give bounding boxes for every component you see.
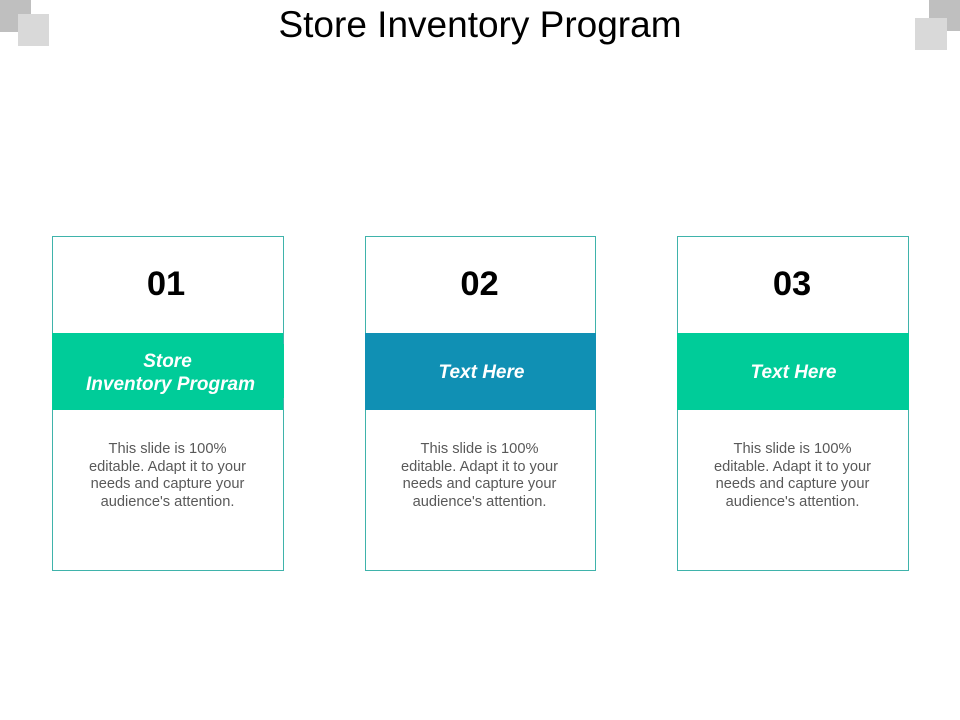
band: Text Here 2 bbox=[365, 333, 596, 410]
text block: card 02 description: audience's attention. bbox=[413, 494, 546, 510]
text block: card 03 description bbox=[714, 441, 871, 510]
band: Store Inventory Program: Store bbox=[143, 351, 192, 372]
decoration: top-left squares bbox=[0, 0, 49, 46]
text block: card 03 description: audience's attention. bbox=[726, 494, 859, 510]
text block: card 01 description: editable. Adapt it to your bbox=[89, 459, 246, 475]
text block: card 01 description: This slide is 100% bbox=[108, 441, 226, 457]
number 02: 02 bbox=[460, 265, 499, 303]
band: Text Here 3: Text Here bbox=[751, 362, 836, 383]
text block: card 03 description: This slide is 100% bbox=[734, 441, 852, 457]
panel: card 02 bbox=[365, 236, 596, 571]
decoration: top-right squares bbox=[915, 0, 960, 50]
panel: card 01 bbox=[52, 236, 284, 571]
text block: card 01 description: needs and capture your bbox=[91, 476, 244, 492]
text block: card 02 description: This slide is 100% bbox=[420, 441, 538, 457]
text block: card 03 description: needs and capture your bbox=[716, 476, 869, 492]
text block: card 03 description: editable. Adapt it to your bbox=[714, 459, 871, 475]
band: Store Inventory Program: Inventory Program bbox=[86, 374, 255, 395]
number 03: 03 bbox=[773, 265, 811, 303]
band: Text Here 2: Text Here bbox=[439, 362, 524, 383]
text block: card 01 description: audience's attention. bbox=[101, 494, 234, 510]
band: Text Here 3 bbox=[677, 333, 909, 410]
text block: card 01 description bbox=[89, 441, 246, 510]
text block: card 02 description: needs and capture your bbox=[403, 476, 556, 492]
title: Store Inventory Program bbox=[278, 4, 682, 45]
text block: card 02 description: editable. Adapt it to your bbox=[401, 459, 558, 475]
band: Store Inventory Program bbox=[52, 333, 284, 410]
number 01: 01 bbox=[147, 265, 185, 303]
panel: card 03 bbox=[677, 236, 909, 571]
text block: card 02 description bbox=[401, 441, 558, 510]
